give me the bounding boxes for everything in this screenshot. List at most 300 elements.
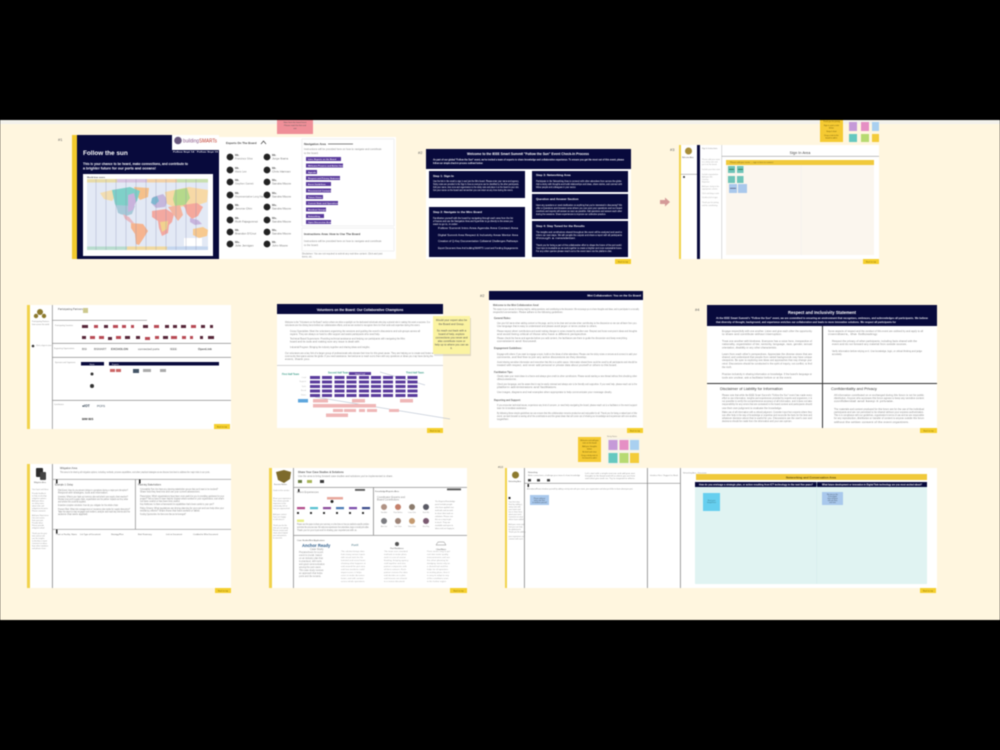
confidentiality section: This is in compliance with our guidelines, organization's terms of use and we are responsible bbox=[834, 413, 924, 417]
frame number 3: #3 bbox=[670, 147, 675, 152]
expert: column one: Mr. bbox=[235, 178, 240, 182]
respect statements left: shared, and understand that people from varied backgrounds may have unique bbox=[722, 355, 813, 359]
arrow between frames bbox=[660, 198, 670, 206]
example section left bbox=[55, 480, 130, 516]
networking and conversation board: Networking and Conversation Area bbox=[786, 476, 836, 480]
step 3 networking area bbox=[532, 171, 628, 192]
sticky note bbox=[433, 316, 471, 356]
case study columns: PortX bbox=[352, 543, 359, 547]
blue tag bbox=[298, 399, 308, 402]
cyan sticky note: thought here bbox=[707, 501, 716, 504]
volunteer name grid bbox=[310, 376, 418, 397]
expert: column two: Mr. bbox=[272, 166, 277, 170]
header bbox=[277, 304, 443, 314]
expert: column one: Ms. bbox=[235, 240, 240, 244]
introduction text: volunteers are the driving force behind our collaborative efforts, and we are excited to recognize them for their work and expertise during this event. bbox=[285, 323, 420, 327]
panel 1: follow the sun bbox=[58, 135, 396, 259]
back to top button: Back to top bbox=[618, 260, 629, 264]
sticky note: the Board and Group. bbox=[439, 322, 465, 326]
blue sticky note: with port data bbox=[828, 499, 837, 502]
white page bbox=[489, 300, 643, 428]
knowledge panel with portraits: in touch. They are bbox=[435, 521, 450, 524]
disclaimer section: effort to use information, insights and experiences provided by experts and organizers, it is bbox=[722, 396, 813, 400]
introduction text: regions. They are always on hand to offer support and assist participants who need help. bbox=[290, 332, 380, 336]
sidebar icon bbox=[34, 468, 46, 484]
frame number 10: #10 bbox=[498, 465, 503, 469]
knowledge panel with portraits: Ben Roy bbox=[423, 526, 429, 528]
sidebar: Add your name and bbox=[508, 523, 524, 526]
intro line and blue note bbox=[527, 484, 633, 505]
expert: column one: Mr. bbox=[235, 191, 240, 195]
introduction text: community that spans across the globe. If you need assistance, feel welcome to reach out to them with any questions or ideas you may have during the bbox=[285, 354, 433, 358]
expert: column one: Julie Jernigan bbox=[235, 244, 254, 248]
back to top button: Back to top bbox=[923, 590, 934, 592]
sticky note palette: Sticky Notes bbox=[607, 435, 617, 438]
step 2 navigate the miro board: Step 2: Navigate to the Miro Board bbox=[433, 210, 482, 214]
cyan sticky note bbox=[703, 493, 720, 511]
step 3 networking area: Participate in the Networking Area to connect with other attendees from across the globe. bbox=[536, 179, 622, 183]
sticky note: connections you never and bbox=[435, 336, 468, 340]
sidebar: Thank you for adding bbox=[508, 532, 525, 534]
example section right: Prescriptive: Which organizations have been most useful to you in providing guidance for your bbox=[140, 494, 224, 498]
case study columns: and how incidents could bbox=[341, 568, 365, 571]
respect statements left: Practice inclusivity in sharing information or knowledge. If the board's language or bbox=[722, 372, 812, 376]
instructions column: Thank you for joining bbox=[702, 202, 719, 204]
respect statements right: accurately. bbox=[832, 352, 842, 356]
instructions column: Add your title bbox=[702, 176, 712, 178]
sidebar with yellow strip: Welcome Area bbox=[682, 156, 694, 159]
case study columns: dredging; teams rely on bbox=[427, 562, 451, 565]
respect statements left: to share and contribute without interruption. bbox=[722, 332, 782, 336]
sidebar text: inspiration to the bbox=[273, 502, 286, 505]
case study columns: partner reviews the data bbox=[384, 571, 408, 574]
disclaimer section: Please note that while the IEEE Smart Summit's "Follow the Sun" event has made every bbox=[722, 393, 813, 397]
welcome header: As part of our global "Follow the Sun" event, we've invited a team of experts to share knowledge and collaborative experience. To ensure you get the most out of this event, please bbox=[433, 158, 624, 162]
column headings row: Credited to Who Document bbox=[193, 533, 218, 536]
knowledge panel with portraits: Carl Voss bbox=[394, 525, 402, 528]
sign-in sticky notes bbox=[728, 166, 747, 193]
case study columns: and good communication bbox=[299, 563, 325, 566]
step 4 stay tuned for the results bbox=[532, 221, 628, 257]
divider bbox=[277, 364, 443, 367]
respect statements left: Engage respectfully with one another. Listen and give each other the opportunity bbox=[722, 329, 813, 333]
knowledge panel with portraits: Ann Lee bbox=[381, 525, 387, 528]
volunteer chart: Board bbox=[301, 389, 306, 392]
sidebar text: Provide feedback bbox=[32, 493, 46, 495]
instructions column bbox=[700, 145, 722, 259]
disclaimer section: not possible to verify the comprehensive accuracy of all information, and it does not take bbox=[722, 399, 812, 403]
sidebar text: mitigations for ports. bbox=[32, 507, 49, 510]
case study columns: is easy to adapt to any bbox=[427, 574, 450, 577]
respect statements left: Learn from each other's perspectives. Appreciate the diverse views that are bbox=[722, 352, 813, 356]
sticky note instructions: Add your thoughts bbox=[582, 445, 597, 448]
sidebar text: community, tell us bbox=[273, 504, 287, 508]
volunteer chart: Group Lead bbox=[355, 372, 365, 375]
step 2 navigate the miro board: Export Document Area And buildingSMARTS Local and Funding Engagements bbox=[438, 246, 519, 250]
expert: column two: Sandra Moore bbox=[272, 182, 291, 186]
example section right: Funding Opportunities: Are there ones that can be leveraged? bbox=[140, 512, 186, 516]
step 4 stay tuned for the results: The insights and contributions shared throughout this event will be analyzed and used to bbox=[536, 230, 622, 234]
heading row: Make connections, challenge your views & share knowledge bbox=[528, 474, 581, 477]
sticky note instructions: Welcome and add your bbox=[580, 440, 599, 442]
step 1 sign in bbox=[429, 171, 525, 198]
sticky note: top pink: Note from the board team bbox=[284, 121, 307, 124]
case study columns: all their contacts. Each bbox=[384, 568, 407, 571]
case study columns: helps for all operators bbox=[427, 568, 449, 571]
case study columns: The team uses standard bbox=[384, 550, 408, 553]
confidentiality section: for any reproduction, distribution or transfer of content to anyone outside this forum bbox=[834, 416, 924, 420]
case study columns: an approach that helps bbox=[299, 572, 323, 575]
example section right: not been useful or has been less useful. bbox=[140, 499, 180, 503]
instructions column: to a sticky note and bbox=[702, 160, 717, 164]
panel 4: participating partners bbox=[27, 305, 231, 429]
pink team bars bbox=[313, 399, 413, 417]
sidebar text: from your port bbox=[32, 519, 44, 522]
frame number 5: #2 bbox=[480, 293, 485, 298]
sidebar text: about risks and bbox=[32, 504, 44, 508]
welcome header: follow our simple check-in process outlined below: bbox=[433, 161, 483, 165]
respect statements left bbox=[722, 329, 813, 380]
case study columns: faster, and with context bbox=[341, 577, 364, 580]
sticky note instructions: the board to add it bbox=[582, 456, 597, 460]
sidebar text: Share your experience bbox=[273, 498, 291, 500]
introduction text: board and its tools and making sure any issue is dealt with. bbox=[290, 340, 360, 344]
expert: column two: Ms. bbox=[272, 203, 277, 207]
blue sticky note: is that digital bbox=[828, 495, 838, 498]
back to top button: Back to top bbox=[217, 426, 228, 428]
example section right: Key Attributes: Is there a framework for capabilities that's been useful to your port? bbox=[140, 502, 214, 506]
step 1 sign in: Sticky notes are provided in the Sign In Area so everyone can be identified by the other participants. bbox=[433, 182, 519, 186]
volunteer chart: Tools bbox=[302, 386, 306, 388]
body text: Welcome to the Mini Collaboration Area! bbox=[493, 304, 539, 307]
introduction text: event, thank you. bbox=[285, 357, 310, 361]
example section left: Review your port's supply chain, organization and its partner impacts as they arise bbox=[58, 497, 128, 501]
body text: discussions. bbox=[497, 377, 517, 381]
navigation area: Welcome Process and Action Items bbox=[308, 164, 346, 167]
yellow sticky: key bbox=[820, 120, 843, 142]
knowledge panel with portraits: this as a way to get bbox=[435, 518, 452, 521]
respect statements left: Treat one another with kindness. Everyone has a voice here, irrespective of bbox=[722, 339, 812, 343]
event cards: Event Experiences bbox=[297, 490, 319, 494]
knowledge panel with portraits: Ravi Mehra bbox=[394, 511, 402, 514]
case study columns: from many sensor inputs bbox=[341, 553, 366, 556]
blue sticky note: twins will grow bbox=[827, 497, 838, 500]
case study columns bbox=[297, 539, 451, 583]
sidebar text bbox=[273, 489, 291, 540]
sidebar bbox=[508, 472, 525, 540]
world time zone map: World time zones bbox=[87, 176, 106, 179]
sidebar text: Add your contact bbox=[273, 513, 287, 516]
blue sticky note bbox=[822, 492, 843, 505]
instructions box: Disclaimer: You are not required to submit any real-time content. Click and post bbox=[302, 252, 383, 256]
column headings row bbox=[56, 530, 218, 536]
sidebar icon: Mitigation Area bbox=[34, 481, 46, 484]
sticky note: board of help, explore bbox=[438, 332, 465, 336]
sidebar text: to talk about it bbox=[273, 518, 285, 521]
back to top button bbox=[627, 428, 643, 433]
case study columns: real time water quality bbox=[427, 553, 449, 556]
sticky note: top pink bbox=[277, 120, 313, 134]
back to top button bbox=[450, 588, 467, 593]
expert: column one: Ruth Fajegunmoi bbox=[235, 220, 258, 224]
step 2 navigate the miro board: want to go to, in order: bbox=[433, 222, 458, 226]
organization logos bbox=[54, 347, 212, 351]
respect statements right: event and do not forward any material from outside sources. bbox=[832, 342, 907, 346]
step 4 stay tuned for the results: through a newsletter. bbox=[536, 236, 576, 240]
event cards: Please use this space to share your summary, or a few lines on how you tackled a specific problem bbox=[297, 522, 369, 526]
disclaimer section: Disclaimer of Liability for Information bbox=[720, 386, 783, 391]
example section left: Example 1: Delay bbox=[55, 484, 74, 486]
expert: column one: Jerome Chin bbox=[235, 206, 252, 210]
sidebar text: from other members bbox=[32, 544, 48, 548]
disclaimer section: can offer help in the way of knowledge or expertise and reconcile the facts for the best and bbox=[722, 413, 812, 417]
expert: column one: Mario Lee bbox=[235, 170, 247, 174]
body text: Engagement Guidelines: bbox=[494, 347, 522, 350]
case study columns: Port Resilience bbox=[390, 547, 405, 550]
welcome header: Welcome to the IEEE Smart Summit "Follow the Sun" Event Check-In Process bbox=[467, 152, 589, 156]
disclaimer section: use their own judgment to evaluate the knowledge. bbox=[722, 406, 782, 410]
instructions column: Sign In Instructions bbox=[702, 147, 717, 150]
case study columns: on an industry plan that bbox=[299, 557, 323, 560]
logo bbox=[172, 135, 219, 150]
sidebar logo: from across the world bbox=[32, 323, 49, 326]
body text: Use language that is easy to understand and please avoid jargon or terms unclear to others. bbox=[497, 324, 597, 328]
navigation area bbox=[302, 139, 394, 226]
frame background bbox=[505, 468, 937, 588]
case study columns: this when planning for bbox=[427, 559, 449, 562]
frame background bbox=[27, 464, 231, 588]
confidentiality section bbox=[831, 386, 925, 424]
back to top button bbox=[920, 588, 936, 593]
intro text: a brighter future for our ports and oceans! bbox=[83, 166, 156, 170]
expert: column two: Sandra Moore bbox=[272, 206, 291, 210]
sidebar text: Please comment bbox=[32, 510, 46, 512]
step 1 sign in: Add your name, time zone and organization to the sticky note and place it on the board in your slot. bbox=[433, 185, 519, 189]
sidebar: the global ports bbox=[508, 528, 521, 531]
case study columns: This case study reviews bbox=[299, 569, 324, 572]
header: Volunteers on the Board: Our Collaborative Champions bbox=[317, 308, 403, 312]
case study columns: in making plans, then it bbox=[427, 571, 450, 574]
knowledge panel with portraits bbox=[375, 488, 461, 530]
sticky note instructions: note on the board bbox=[582, 442, 597, 444]
case study columns: and lessons are shared bbox=[384, 577, 408, 580]
volunteer chart: Lead bbox=[302, 377, 306, 379]
confidentiality section: All information contributed on or exchanged during this forum is not for public bbox=[834, 393, 925, 397]
sidebar logo bbox=[274, 470, 291, 486]
respect statements right: members, the following: bbox=[828, 332, 879, 336]
body text: Clearly state your main ideas in a frame and always give credit to other contributors. Please avoid starting a new thread without first checking other bbox=[497, 374, 637, 378]
knowledge panel with portraits: Knowledge/Experts Area bbox=[375, 490, 400, 493]
yellow sticky: key: below. bbox=[829, 128, 835, 130]
case study columns: and decides on a plan bbox=[384, 575, 406, 577]
sign in main area bbox=[722, 145, 879, 259]
blue sticky note: My view on this bbox=[827, 493, 838, 496]
navigation area: Event Guidelines bbox=[308, 183, 327, 186]
confidentiality section: The materials and content produced for this forum are for the use of the individual bbox=[834, 407, 924, 411]
yellow sticky: key: Sign in, post a note bbox=[824, 124, 839, 127]
header bbox=[489, 291, 643, 300]
column headings row: Plant or Facility: Name bbox=[56, 533, 78, 536]
step 2 navigate the miro board: Digital Summit Area Respect & Inclusivity Areas Mentor Area bbox=[438, 233, 519, 237]
volunteer chart: Support bbox=[299, 380, 306, 383]
sidebar text: use the insights bbox=[32, 537, 45, 540]
respect statements right: Respect the privacy of other participants, including facts shared with the bbox=[832, 339, 918, 343]
contributor logos bbox=[54, 403, 105, 421]
case study columns: event is crucial, based bbox=[299, 554, 322, 557]
case study columns: users to make decisions bbox=[341, 574, 365, 577]
respect statements left: nationality, organization of tier, seniority, language, race, gender, sexual bbox=[722, 342, 812, 346]
expert: column one: Brandon D'Cruz bbox=[235, 232, 257, 236]
example section left: Examine complex solutions: how do you mitigate for the whole chain bbox=[58, 503, 118, 507]
volunteer chart: Third Half Team bbox=[406, 372, 424, 374]
body text bbox=[493, 304, 639, 421]
sticky note: it. bbox=[450, 346, 453, 350]
panel 8: mitigation area bbox=[27, 464, 231, 593]
sidebar text: mitigation detail bbox=[32, 526, 45, 530]
sidebar text: time you are giving bbox=[273, 526, 288, 530]
instructions column: put it on the board. bbox=[702, 163, 717, 166]
example section right: Policy Drivers: What regulations are driving planning for your port and can help drive your bbox=[140, 506, 224, 510]
back to top button: Back to top bbox=[453, 590, 464, 592]
heading bbox=[298, 470, 393, 483]
event cards bbox=[297, 489, 370, 532]
blue sticky note: over time bbox=[829, 501, 836, 504]
expert: column one: Mr. bbox=[235, 216, 240, 220]
column headings row: Link to Document bbox=[166, 533, 183, 536]
sidebar text: if you are happy bbox=[273, 516, 286, 518]
heading row: and what you work on. Try to respond to others. bbox=[585, 477, 636, 480]
intro line and blue note: sticky note here bbox=[534, 499, 545, 502]
navigation area: to the board. bbox=[304, 151, 319, 155]
body text: If you encounter technical issues, experience any kind of concern, or need help navigating the board, please reach out to a facilitator or the event support bbox=[497, 403, 637, 407]
knowledge panel with portraits: Lena Ortiz bbox=[408, 511, 416, 514]
sticky note instructions bbox=[578, 437, 601, 462]
navigation area: Current State and Operations bbox=[308, 202, 339, 205]
frame number 2: #2 bbox=[418, 150, 423, 155]
question and answer section: offer a Questions and Answers area where you can post your questions and our board bbox=[536, 206, 622, 210]
vendor columns: Experts bbox=[112, 363, 119, 366]
sidebar: others have added bbox=[508, 518, 523, 521]
knowledge panel with portraits: methods and we wish bbox=[435, 509, 453, 512]
sidebar text: Add your ideas bbox=[32, 500, 44, 502]
instructions column: Please add your name bbox=[702, 159, 720, 161]
step 1 sign in: Use the link in the email to sign in and join the Miro board. Please enter your name and agency. bbox=[433, 179, 519, 183]
heading and intro: This area is for sharing all mitigation options, including methods, process capabilities, and other practical strategies as we discuss how best to address the major risks in our ports. bbox=[60, 470, 210, 474]
expert: column two: Ms. bbox=[272, 216, 277, 220]
step 2 navigate the miro board bbox=[429, 207, 525, 257]
white backing bbox=[426, 149, 631, 259]
contributor logos: Contributors bbox=[54, 403, 64, 406]
intro line and blue note: Please add your bbox=[534, 498, 546, 500]
confidentiality section: distribution. Anyone who accesses this forum agrees to keep any sensitive content bbox=[834, 396, 924, 400]
step 4 stay tuned for the results: inform our next steps. We will compile the outputs and share a report with all participants bbox=[536, 233, 623, 237]
organization logos: IEEE bbox=[170, 347, 177, 351]
panel 3: sign in area bbox=[670, 120, 879, 264]
panel 6: mini collaboration bbox=[480, 291, 643, 433]
knowledge panel with portraits: Nora Diaz bbox=[408, 525, 416, 528]
instructions box: Instructions will be provided here on how to navigate and contribute bbox=[304, 239, 382, 243]
respect statements left: viewpoints. Be open to exploring new ideas and approaches that may change your bbox=[722, 358, 812, 362]
header: At the IEEE Smart Summit's "Follow the Sun" event, we are committed to ensuring an environment that recognizes, embraces, and acknowledges all participants. We believe bbox=[716, 316, 929, 320]
example section right: resiliency efforts? Share those that have worked or failed. bbox=[140, 508, 200, 512]
dividers bbox=[707, 326, 937, 428]
experts on the board bbox=[219, 137, 396, 259]
instructions column: Expertise bbox=[702, 180, 710, 184]
intro line and blue note: Please introduce yourself by adding a sticky note with your name, your organization and what you'd like to share about your port. bbox=[536, 488, 633, 490]
sidebar: connect with each bbox=[508, 538, 523, 540]
sticky note palette bbox=[607, 435, 640, 465]
body text: Avoid sharing sensitive information and remember that this is a public space. Information shared here could be used by all participants and should be bbox=[497, 360, 637, 364]
knowledge panel with portraits: Tom Ash bbox=[381, 511, 387, 514]
heading row: Networking Area - Discussion bbox=[683, 472, 706, 474]
sidebar logo: Participating Partners bbox=[32, 320, 49, 323]
expert: column one: Mr. bbox=[235, 228, 240, 232]
sidebar text: Please provide bbox=[32, 525, 44, 527]
panel 2: welcome process bbox=[418, 149, 631, 264]
sidebar logo: Click a logo to view bbox=[36, 344, 52, 347]
sidebar: Networking Area bbox=[508, 480, 521, 483]
body text: Facilitation Tips: bbox=[494, 371, 513, 374]
intro text: This is your chance to be heard, make connections, and contribute to bbox=[83, 162, 189, 166]
world time zone map bbox=[83, 174, 213, 256]
instructions column: Include your time zone bbox=[702, 168, 720, 171]
sidebar text: mitigation options. bbox=[32, 497, 47, 500]
navigation area: Open Discussion Area bbox=[308, 221, 332, 224]
event cards: Thank you for your input and for sharing your experiences with us. bbox=[297, 528, 357, 532]
disclaimer section: Make use of all information with a critical judgment. Consider input from experts where they bbox=[722, 410, 813, 414]
body text: Use images, diagrams and real examples when appropriate to help communicate your message clearly. bbox=[497, 390, 612, 394]
expert: column two bbox=[264, 153, 291, 248]
expert: column two: Ms. bbox=[272, 191, 277, 195]
contributor logos: PCFS bbox=[97, 404, 105, 408]
sidebar text: how you approached bbox=[273, 508, 290, 510]
expert: column two: Mr. bbox=[272, 240, 277, 244]
sidebar text: Thank you for the bbox=[273, 524, 287, 527]
sidebar text: Comment on ideas bbox=[32, 542, 47, 545]
body text: This space is your canvas for sharing insights, asking questions, and contributing to the discussion. We encourage you to share thoughts and ideas, and to participate in a mutually bbox=[493, 307, 639, 311]
question and answer section: Question and Answer Section bbox=[536, 197, 579, 201]
column headings row: Brief Summary bbox=[138, 533, 153, 536]
case study columns: Preparedness for a port bbox=[299, 551, 323, 554]
case study columns: Case Studies/Best Applications bbox=[297, 539, 325, 542]
frame number 1: #1 bbox=[58, 137, 63, 142]
sign in main area: Sign In Area bbox=[790, 151, 811, 155]
case study columns: Ports need a way to get bbox=[427, 550, 450, 553]
step 4 stay tuned for the results: Thank you for being a part of this collaborative effort to shape the future of the port world. bbox=[536, 243, 622, 247]
vendor columns: Sponsors and Organizers bbox=[55, 362, 75, 364]
back to top button: Back to top bbox=[218, 590, 229, 592]
example section right: Share how they feed into and use your current assessment. bbox=[140, 490, 200, 494]
heading and intro bbox=[60, 466, 210, 474]
expert: column two: Sandra Moore bbox=[272, 194, 291, 198]
heading row bbox=[528, 471, 706, 482]
body text: consistent and focused. bbox=[497, 339, 537, 343]
step 1 sign in: Step 1: Sign In bbox=[433, 174, 454, 178]
respect statements left: tools are unclear, ask a facilitator before or at the event. bbox=[722, 376, 792, 380]
frame number 6: #4 bbox=[695, 307, 700, 312]
back to top button bbox=[214, 424, 230, 429]
panel 10: networking and conversation bbox=[498, 435, 937, 593]
sticky note: help up to where you can as bbox=[435, 342, 469, 346]
instructions box: to the board. bbox=[304, 243, 319, 247]
back to top button bbox=[863, 259, 879, 264]
sidebar text: to develop a report bbox=[32, 540, 47, 542]
respect statements left: the truth. bbox=[722, 365, 732, 369]
step 3 networking area: Step 3: Networking Area bbox=[536, 173, 571, 177]
sidebar text: Your Input and Ideas bbox=[32, 488, 49, 491]
expert: column two: John Moore bbox=[272, 244, 288, 248]
introduction text: Welcome to the "Volunteers on the Board" section where we shine a spotlight on the dedicated individuals who play a pivotal role in making this event a success. Our bbox=[285, 320, 430, 324]
